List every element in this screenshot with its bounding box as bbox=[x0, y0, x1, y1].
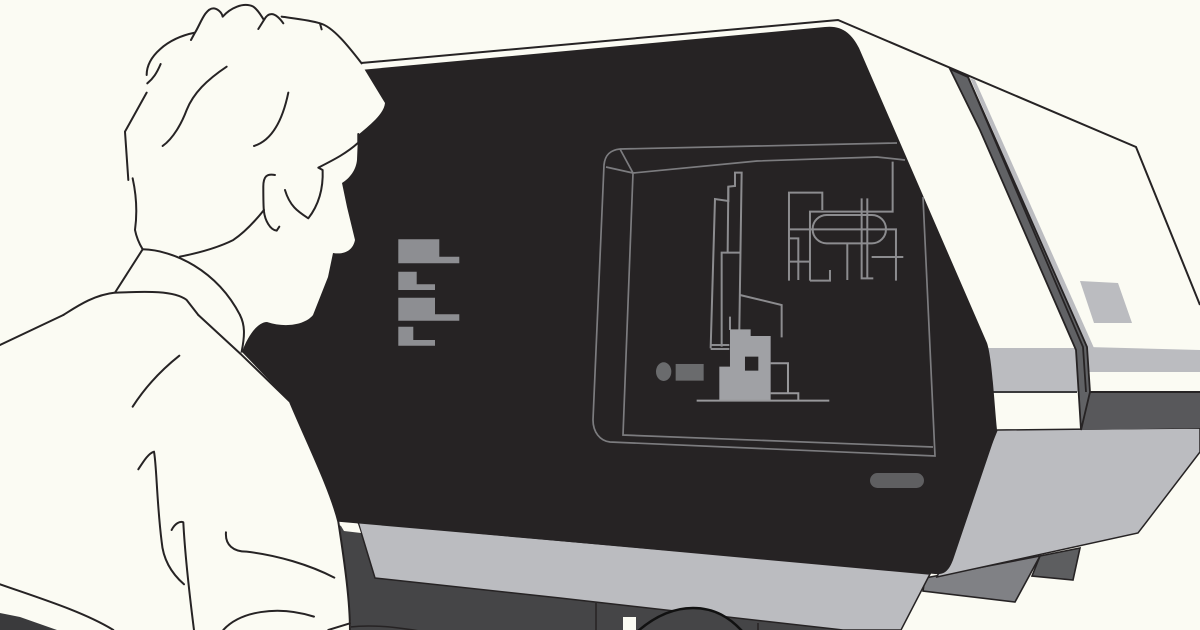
pipe circuit diagram bbox=[789, 162, 903, 281]
dark band top line bbox=[1090, 391, 1200, 393]
bar 3 bbox=[398, 298, 459, 321]
machine top housing outline bbox=[361, 20, 1200, 305]
grey band lower line bbox=[992, 391, 1077, 393]
shoulder top bbox=[63, 292, 198, 315]
machine bbox=[240, 20, 1200, 630]
grey dot bbox=[656, 362, 671, 381]
base seam lines bbox=[350, 603, 758, 630]
monitor inner frame bbox=[606, 149, 933, 447]
lower machine details bbox=[350, 603, 758, 630]
bar 2 bbox=[398, 272, 435, 290]
schematic drawing on screen bbox=[656, 162, 903, 401]
fold lines bbox=[133, 356, 179, 407]
bottom left dark shape bbox=[0, 613, 57, 630]
arm folds bbox=[0, 532, 350, 630]
collar continuation bbox=[0, 315, 244, 353]
right side grey band bbox=[988, 348, 1078, 392]
hair strands bbox=[163, 67, 288, 146]
grey rectangle bbox=[676, 364, 704, 381]
dark base band on right bbox=[1080, 392, 1200, 430]
bar 4 bbox=[398, 327, 435, 346]
grey label square bbox=[1080, 281, 1132, 323]
monitor outer frame bbox=[593, 143, 935, 456]
front grey panel bbox=[358, 522, 930, 630]
small bar icons on screen bbox=[398, 239, 459, 346]
building window bbox=[745, 357, 758, 371]
person bbox=[0, 0, 385, 630]
lower right grey panel bbox=[937, 428, 1200, 577]
flap: rear dark bbox=[1032, 548, 1080, 580]
person silhouette fill bbox=[0, 0, 385, 630]
dark base bbox=[335, 525, 905, 630]
shoulder edge bbox=[240, 353, 350, 630]
building side and ground lines bbox=[697, 363, 829, 401]
dark slot strip bbox=[950, 69, 1090, 430]
flap: front mid grey bbox=[923, 556, 1040, 602]
sideburn bbox=[285, 134, 358, 218]
right side upper band bbox=[1087, 347, 1200, 372]
dial arc bbox=[638, 608, 742, 630]
collar bbox=[115, 249, 240, 315]
ear bbox=[263, 175, 279, 231]
jaw bbox=[180, 210, 264, 257]
light strip beside slot bbox=[970, 78, 1094, 348]
inner slot line bbox=[968, 77, 1086, 392]
tower lines bbox=[711, 173, 782, 349]
black screen bbox=[240, 27, 997, 574]
white slit at panel corner bbox=[338, 521, 361, 533]
hair top bbox=[147, 5, 362, 75]
shirt lines bbox=[0, 315, 350, 630]
sleeve folds bbox=[138, 452, 194, 630]
screen button bbox=[870, 473, 924, 488]
grey building block bbox=[719, 329, 771, 401]
head back bbox=[125, 64, 161, 249]
bar 1 bbox=[398, 239, 459, 263]
head and collar lines bbox=[63, 5, 362, 315]
white switch bbox=[623, 617, 636, 630]
inner monitor frame bbox=[593, 143, 935, 456]
